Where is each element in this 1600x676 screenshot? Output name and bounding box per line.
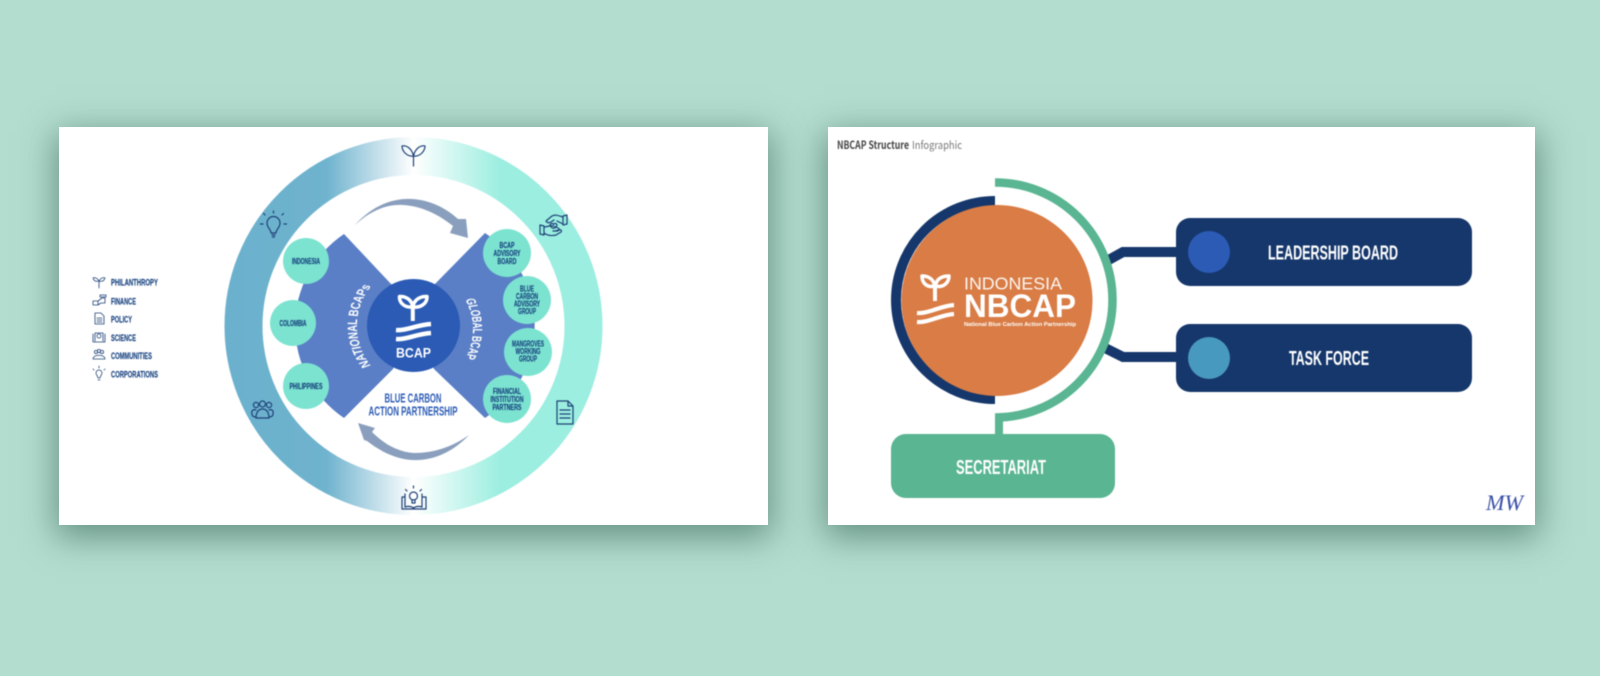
box: Task Force: TASK FORCE xyxy=(1289,348,1369,370)
node: BCAP Advisory Board: BCAP xyxy=(500,241,515,250)
legend row: Finance: FINANCE xyxy=(111,296,136,308)
right wing: global BCAP xyxy=(413,233,535,418)
text: BCAP: BCAP xyxy=(396,346,431,360)
box: Leadership Board: LEADERSHIP BOARD xyxy=(1268,242,1398,264)
legend: stakeholder categories xyxy=(93,278,158,380)
panel: left card background xyxy=(59,127,768,525)
node: Financial Institution Partners xyxy=(483,375,531,423)
node: BCAP Advisory Board: ADVISORY xyxy=(494,249,521,258)
connector: to Leadership Board xyxy=(1105,252,1176,262)
icon: book with bulb (bottom of ring) xyxy=(402,486,426,509)
box: Task Force xyxy=(1176,324,1472,392)
node: Financial Institution Partners: PARTNERS xyxy=(492,403,522,412)
arc: navy half ring xyxy=(896,201,995,399)
node: Mangroves Working Group: GROUP xyxy=(519,354,537,364)
box: Leadership Board xyxy=(1176,218,1472,286)
node: Indonesia: INDONESIA xyxy=(292,257,320,266)
icon: document (lower right of ring) xyxy=(557,401,573,424)
icon: hands (right of ring) xyxy=(540,215,567,236)
node: BCAP Advisory Board: BOARD xyxy=(498,257,517,266)
node: Blue Carbon Advisory Group xyxy=(503,276,551,324)
panel: NBCAP structure xyxy=(837,137,1525,515)
arrow: bottom curved arrow xyxy=(358,423,469,460)
logo: sprout and waves xyxy=(917,276,954,322)
node: Blue Carbon Advisory Group: BLUE xyxy=(520,284,534,294)
panel: right card background xyxy=(828,127,1535,525)
text: National Blue Carbon Action Partnership: National Blue Carbon Action Partnership xyxy=(964,322,1076,328)
legend row: Policy: POLICY xyxy=(111,314,132,326)
box: Secretariat: SECRETARIAT xyxy=(956,456,1046,479)
legend row: Corporations: CORPORATIONS xyxy=(111,370,158,380)
arrow: top curved arrow xyxy=(355,199,468,238)
center BCAP badge xyxy=(367,279,460,372)
node: Philippines: PHILIPPINES xyxy=(290,382,323,391)
left wing: national BCAPs xyxy=(295,234,413,418)
heading: Blue Carbon Action Partnership: BLUE CARBON xyxy=(384,392,442,406)
node: Financial Institution Partners: INSTITUTION xyxy=(490,395,524,404)
label: National BCAPs: NATIONAL BCAPs xyxy=(347,284,371,369)
icon: sprout (top of ring) xyxy=(402,146,425,166)
node: Blue Carbon Advisory Group: GROUP xyxy=(518,307,536,316)
heading: Blue Carbon Action Partnership: ACTION PARTNERSHIP xyxy=(368,404,458,418)
node: Indonesia xyxy=(283,238,329,284)
icon: people (lower left of ring) xyxy=(252,401,273,418)
legend row: Philanthropy: PHILANTHROPY xyxy=(111,278,158,288)
node: Blue Carbon Advisory Group: ADVISORY xyxy=(514,300,540,308)
arc: green half ring xyxy=(995,182,1112,418)
node: BCAP Advisory Board xyxy=(483,229,531,277)
panel: BCAP diagram xyxy=(224,138,603,515)
node: Colombia: COLOMBIA xyxy=(280,319,307,328)
box: Secretariat xyxy=(891,434,1115,498)
signature: MW: MW xyxy=(1485,490,1525,515)
logo: BCAP sprout xyxy=(396,296,431,339)
legend row: Science: SCIENCE xyxy=(111,333,136,344)
title: NBCAP StructureInfographic xyxy=(837,137,962,153)
text: Indonesia: INDONESIA xyxy=(964,274,1062,294)
node: Mangroves Working Group xyxy=(504,328,552,376)
ring with gradient xyxy=(244,156,584,496)
node: Mangroves Working Group: WORKING xyxy=(516,347,540,356)
connector: to Secretariat xyxy=(995,415,1003,436)
node: Blue Carbon Advisory Group: CARBON xyxy=(516,292,538,301)
circle: orange NBCAP logo disc xyxy=(902,205,1092,396)
text: NBCAP: NBCAP xyxy=(964,288,1076,324)
node: Mangroves Working Group: MANGROVES xyxy=(512,340,544,348)
label: Global BCAP: GLOBAL BCAP xyxy=(466,298,483,360)
node: Colombia xyxy=(270,300,316,346)
legend row: Communities: COMMUNITIES xyxy=(111,351,152,362)
connector: to Task Force xyxy=(1103,347,1176,357)
icon: light bulb (upper left of ring) xyxy=(260,211,286,237)
node: Philippines xyxy=(283,363,329,409)
node: Financial Institution Partners: FINANCIAL xyxy=(493,387,521,396)
